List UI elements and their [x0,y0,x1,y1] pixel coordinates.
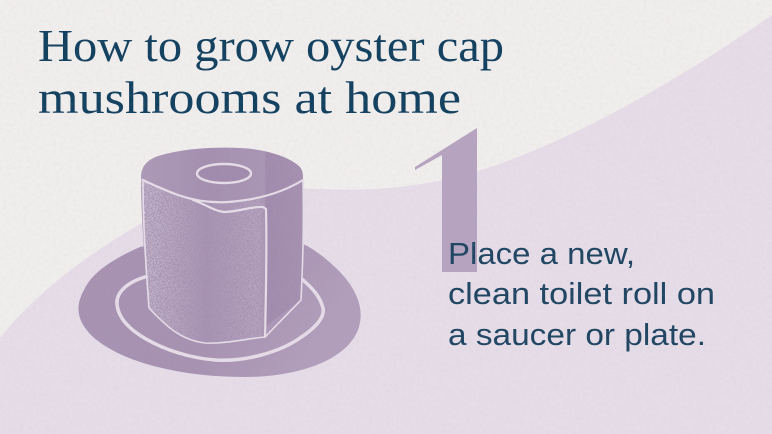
title line 2: mushrooms at home [38,72,461,123]
description line 3: a saucer or plate. [448,318,706,352]
description line 2: clean toilet roll on [448,277,715,311]
roll outline [143,180,303,343]
roll paper grain [141,178,264,342]
loose paper flap line [193,200,266,337]
roll body [141,148,303,343]
plate rim line [117,277,323,360]
title line 1: How to grow oyster cap [38,20,504,71]
roll core hole [197,164,251,183]
roll top edge line [143,180,303,202]
step description [448,237,715,352]
description line 1: Place a new, [448,237,635,271]
step number 1: 1 [279,75,597,321]
illustration: toilet roll on a plate [78,148,361,377]
plate [78,236,361,377]
title [38,20,504,123]
